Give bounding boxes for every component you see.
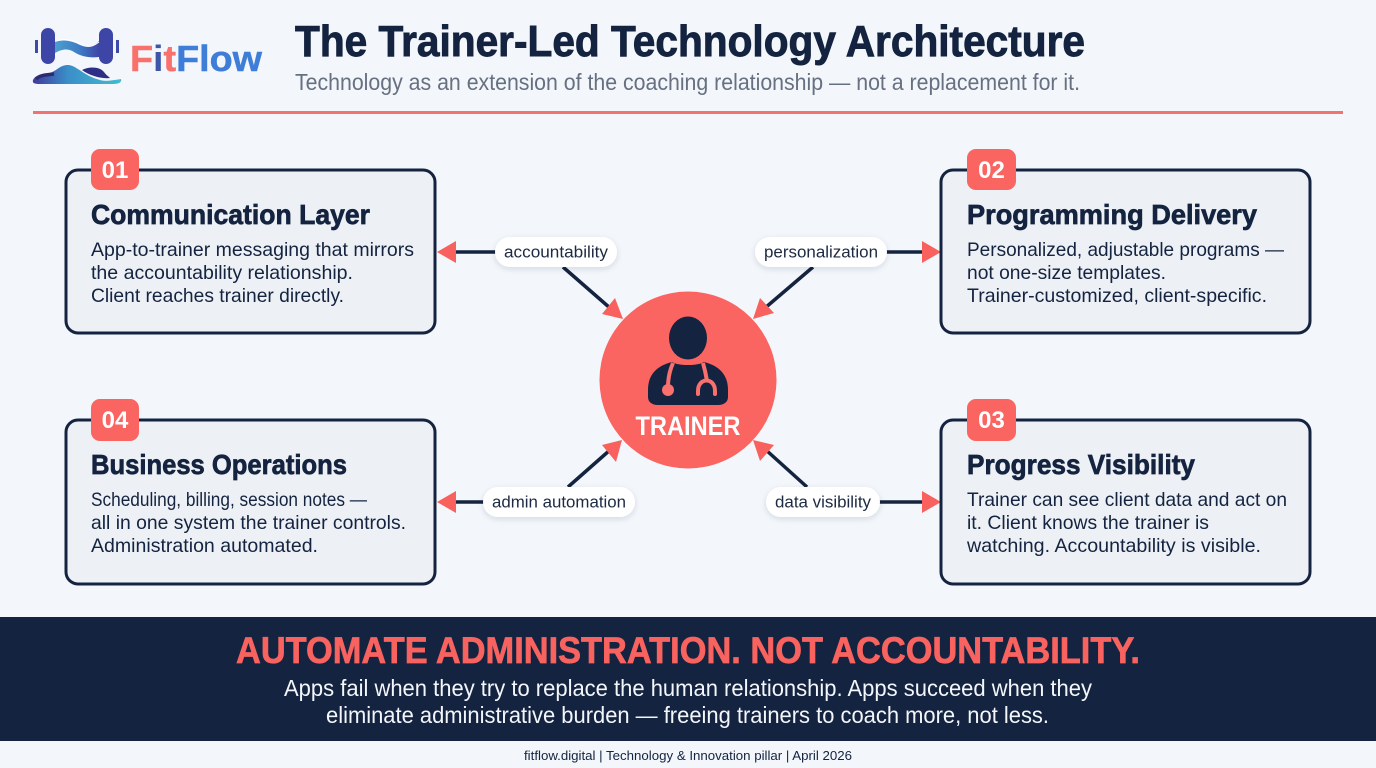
logo: FitFlow [33,28,263,84]
connector: data visibility: data visibility [775,494,872,512]
panel: 02 Programming Delivery: Personalized, adjustable programs — [967,239,1284,261]
panel: 03 Progress Visibility: 03 [978,407,1005,434]
panel: 02 Programming Delivery: not one-size templates. [967,262,1166,284]
label: TRAINER: TRAINER [636,411,740,441]
banner text: eliminate administrative burden — freeing trainers to coach more, not less. [326,702,1049,728]
panel: 04 Business Operations: Scheduling, billing, session notes — [91,489,367,511]
panel: 01 Communication Layer [66,149,435,333]
connector: admin automation: admin automation [492,494,626,512]
hub: trainer [600,292,776,468]
panel: 03 Progress Visibility: watching. Accountability is visible. [966,535,1261,557]
panel: 01 Communication Layer: App-to-trainer messaging that mirrors [91,239,414,261]
panel: 03 Progress Visibility [941,399,1310,584]
banner headline: AUTOMATE ADMINISTRATION. NOT ACCOUNTABILITY. [236,630,1140,671]
icon: trainer with stethoscope [648,316,728,405]
wordmark: FitFlow [130,38,263,79]
panel: 04 Business Operations: Business Operations [91,449,347,480]
panel: 03 Progress Visibility: Progress Visibility [967,449,1195,480]
banner text [284,675,1092,728]
title: The Trainer-Led Technology Architecture [295,17,1085,66]
panel: 02 Programming Delivery: Programming Delivery [967,199,1257,230]
panel: 02 Programming Delivery: Trainer-customized, client-specific. [967,285,1267,307]
panel: 04 Business Operations [66,399,435,584]
panel: 01 Communication Layer: Client reaches trainer directly. [91,285,344,307]
panel: 01 Communication Layer: Communication Layer [91,199,370,230]
connector: admin automation [437,440,635,517]
panel: 03 Progress Visibility: it. Client knows the trainer is [967,512,1209,534]
panel: 02 Programming Delivery: 02 [978,157,1005,184]
banner text: Apps fail when they try to replace the human relationship. Apps succeed when they [284,675,1092,701]
panel: 04 Business Operations: 04 [102,407,129,434]
footer: fitflow.digital | Technology & Innovation pillar | April 2026 [524,748,852,763]
connector: accountability [437,237,623,319]
panel: 04 Business Operations: Administration automated. [91,535,318,557]
connector: personalization: personalization [764,244,878,262]
subtitle: Technology as an extension of the coaching relationship — not a replacement for it. [295,69,1080,95]
connector: accountability: accountability [504,244,609,262]
connector: personalization [753,237,941,319]
icon: dumbbell and wave [33,28,121,84]
panel: 04 Business Operations: all in one system the trainer controls. [91,512,406,534]
banner [0,617,1376,741]
panel: 02 Programming Delivery [941,149,1310,333]
panel: 01 Communication Layer: 01 [102,157,128,184]
panel: 01 Communication Layer: the accountability relationship. [91,262,353,284]
panel: 03 Progress Visibility: Trainer can see client data and act on [967,489,1287,511]
connector: data visibility [753,440,941,517]
